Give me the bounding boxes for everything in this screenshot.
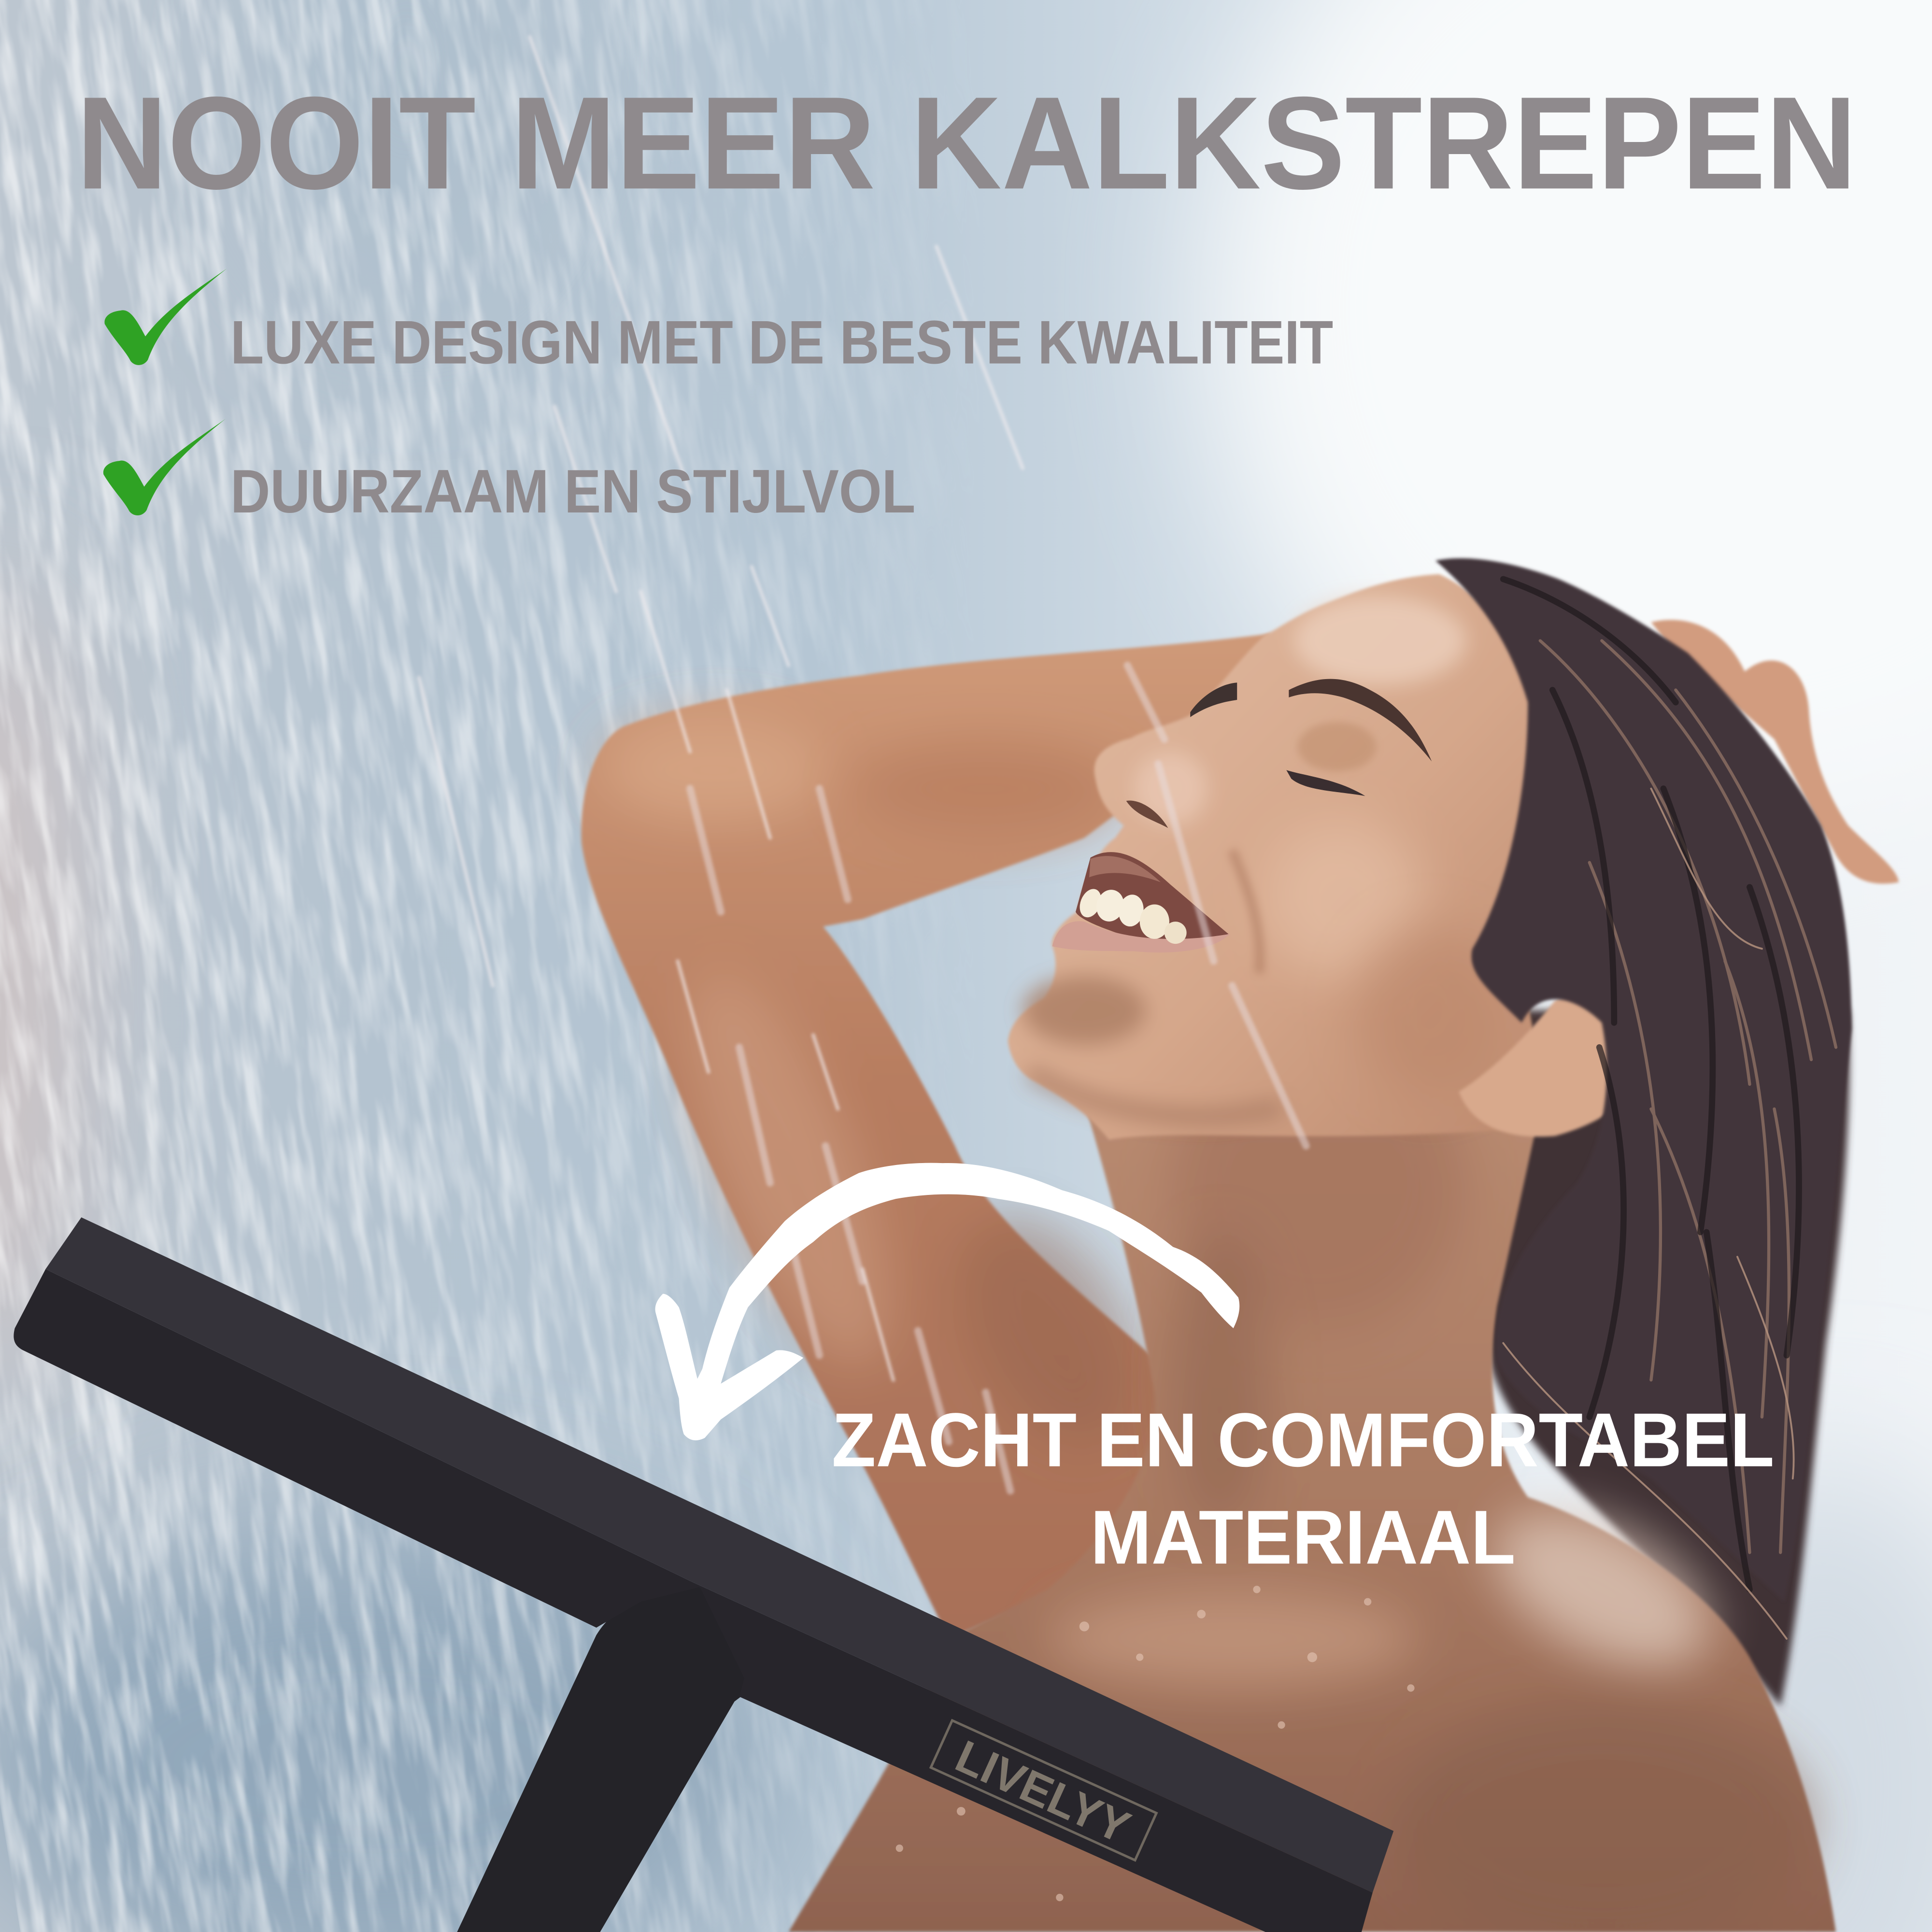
squeegee: blade front face <box>14 1269 1373 1932</box>
water droplets falling over arm and face <box>419 37 1306 1491</box>
icon: green check <box>103 419 226 515</box>
squeegee: brand logo: LIVELYY <box>948 1731 1137 1853</box>
product: black squeegee <box>14 1217 1393 1932</box>
woman: ear <box>1459 995 1640 1136</box>
squeegee: blade top face <box>45 1217 1393 1892</box>
woman: wet hair <box>1435 558 1852 1639</box>
arrow: curved white hand-drawn arrow <box>655 1163 1239 1440</box>
woman: neck and shoulders <box>789 1035 1836 1932</box>
hair: highlight strands <box>1503 579 1836 1639</box>
text: luxe design: LUXE DESIGN MET DE BESTE KWALITEIT <box>230 309 1333 377</box>
check item 1 <box>104 269 1333 377</box>
text: duurzaam: DUURZAAM EN STIJLVOL <box>230 457 915 526</box>
woman: face <box>1008 574 1548 1140</box>
callout: material: MATERIAAL <box>1091 1494 1516 1580</box>
callout: material <box>832 1397 1774 1580</box>
woman: fingers in hair <box>1651 620 1899 884</box>
droplets on shoulder <box>896 1586 1415 1901</box>
squeegee: handle <box>457 1589 745 1932</box>
woman: back hair mass lower part <box>1484 1010 1849 1706</box>
woman: smile <box>1052 852 1230 952</box>
callout: material: ZACHT EN COMFORTABEL <box>832 1397 1774 1483</box>
check item 2 <box>103 419 915 526</box>
woman: eyebrows, closed eye, nostril <box>1126 679 1432 828</box>
title: NOOIT MEER KALKSTREPEN <box>76 69 1857 216</box>
icon: green check <box>104 269 227 365</box>
background: falling water texture <box>0 0 882 1932</box>
woman: forearm and upper arm <box>581 633 1272 1639</box>
